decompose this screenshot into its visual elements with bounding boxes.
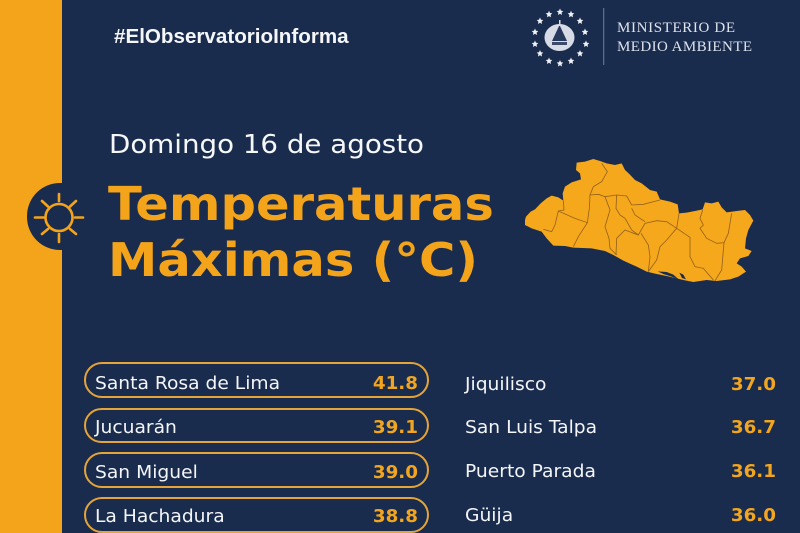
row: Güija: 36.0 <box>731 506 776 526</box>
title: Temperaturas <box>108 177 494 231</box>
row: San Miguel: 39.0 <box>373 463 418 483</box>
row: Jiquilisco: Jiquilisco <box>465 375 546 395</box>
row: San Miguel: San Miguel <box>95 463 198 483</box>
row: San Luis Talpa <box>465 418 776 438</box>
row: Jucuarán: Jucuarán <box>95 418 177 438</box>
date heading: Domingo 16 de agosto <box>109 130 424 160</box>
row: Güija: Güija <box>465 506 513 526</box>
row: Puerto Parada: Puerto Parada <box>465 462 596 482</box>
left orange band <box>0 0 62 533</box>
row: Santa Rosa de Lima <box>84 362 429 398</box>
row: Puerto Parada <box>465 462 776 482</box>
icon: sun <box>34 192 84 244</box>
row: San Luis Talpa: 36.7 <box>731 418 776 438</box>
ministry name: MEDIO AMBIENTE <box>617 39 752 55</box>
row: Jucuarán <box>84 408 429 443</box>
row: Güija <box>465 506 776 526</box>
divider <box>603 8 604 65</box>
row: La Hachadura <box>84 497 429 533</box>
title <box>108 177 494 287</box>
row: Santa Rosa de Lima: Santa Rosa de Lima <box>95 374 280 394</box>
row: Jiquilisco <box>464 375 776 395</box>
row: San Luis Talpa: San Luis Talpa <box>465 418 597 438</box>
row: Jucuarán: 39.1 <box>373 418 418 438</box>
hashtag: #ElObservatorioInforma <box>114 25 349 48</box>
sun badge <box>27 183 62 250</box>
row: San Miguel <box>84 452 429 488</box>
row: Puerto Parada: 36.1 <box>731 462 776 482</box>
icon: coat of arms with stars <box>532 8 589 66</box>
map of El Salvador <box>525 159 754 282</box>
ministry name: MINISTERIO DE <box>617 20 735 36</box>
row: Jiquilisco: 37.0 <box>731 375 776 395</box>
ministry logo <box>532 8 752 66</box>
row: Santa Rosa de Lima: 41.8 <box>373 374 418 394</box>
ministry name <box>617 20 752 55</box>
title: Máximas (°C) <box>108 233 478 287</box>
row: La Hachadura: 38.8 <box>373 507 418 527</box>
row: La Hachadura: La Hachadura <box>95 507 225 527</box>
